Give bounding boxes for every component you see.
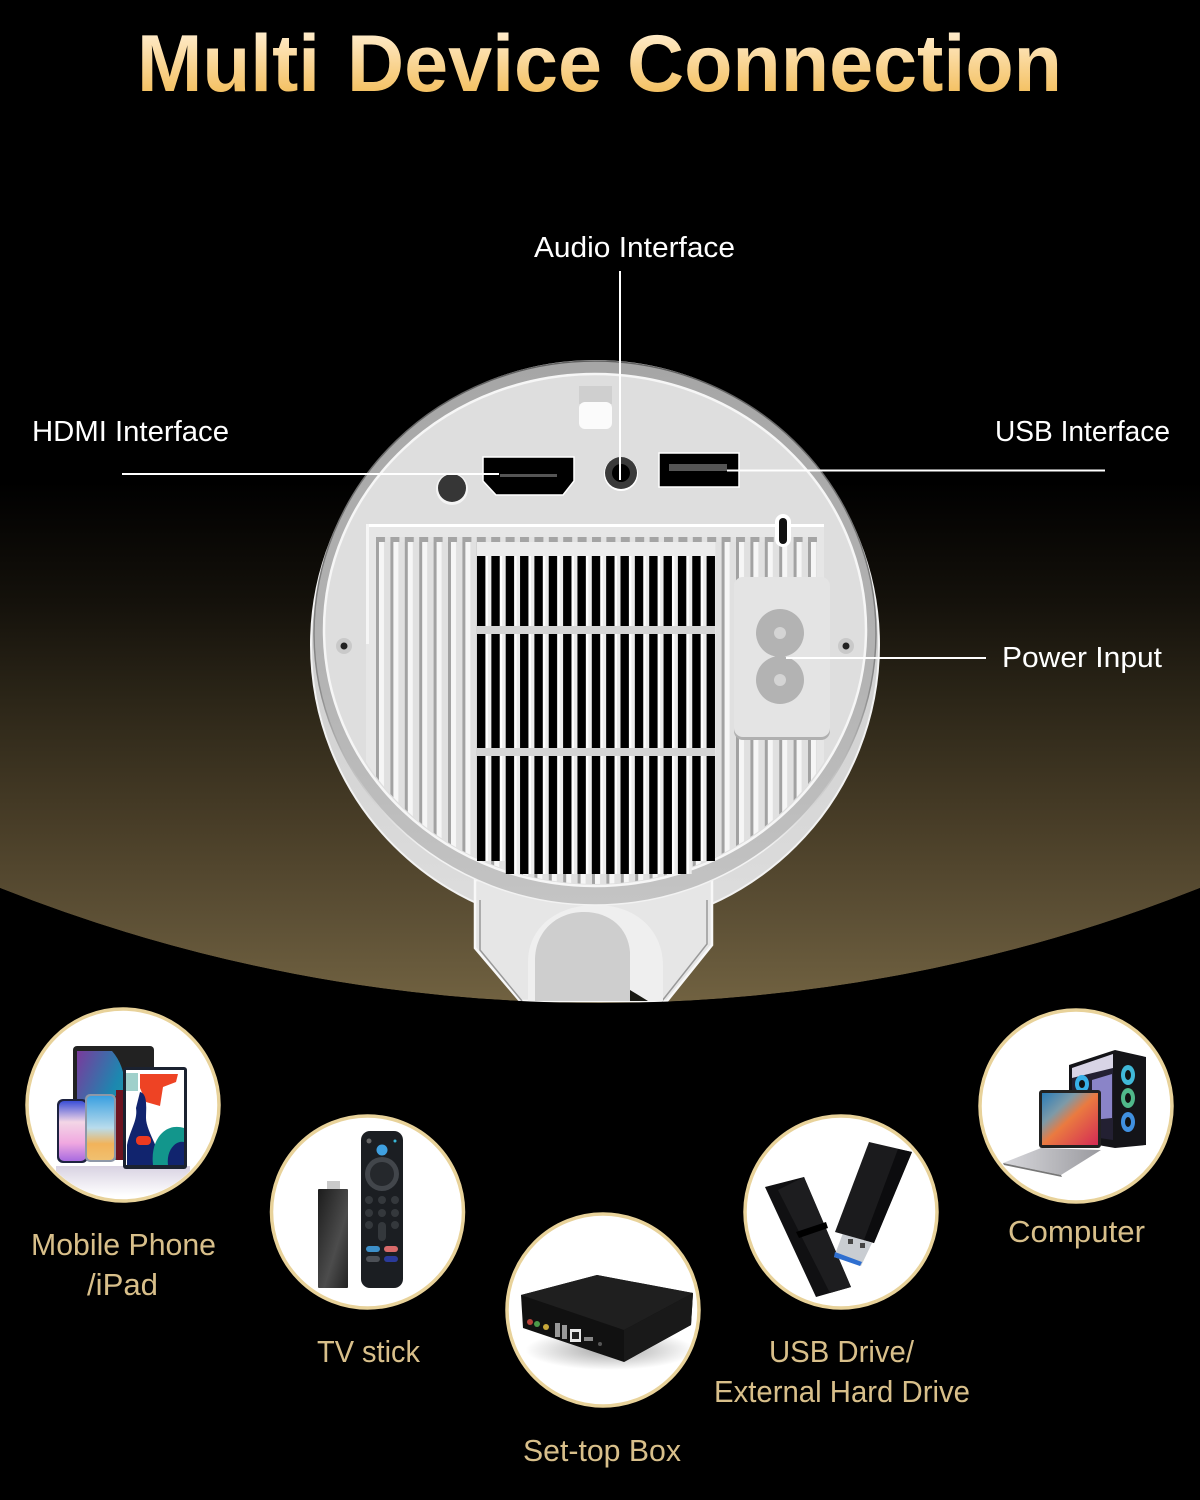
circle [745, 1116, 937, 1308]
screw left [336, 638, 352, 654]
icon: USB connector [834, 1233, 872, 1266]
bottom curve mask [0, 888, 1200, 1500]
outer body [311, 361, 879, 929]
device: USB drive [745, 1116, 937, 1308]
icon: right drive [835, 1142, 912, 1243]
icon: remote [361, 1131, 403, 1288]
icon: phone 2 [85, 1094, 116, 1162]
top tab [579, 386, 612, 429]
callout: audio interface: Audio Interface [534, 232, 735, 264]
USB port [659, 453, 739, 487]
label: USB drive: USB Drive/ [769, 1334, 914, 1369]
background gradient stage with curved base [0, 0, 1200, 1003]
label: mobile phone: Mobile Phone [31, 1227, 216, 1262]
circle [27, 1009, 219, 1201]
callout: USB interface: USB Interface [995, 416, 1170, 448]
callout: power input: Power Input [1002, 642, 1162, 674]
vent ribs [366, 524, 824, 894]
label: mobile phone [31, 1227, 216, 1302]
screw right [838, 638, 854, 654]
device: computer [980, 1010, 1172, 1202]
stem mount [475, 880, 712, 1001]
title: Device [347, 19, 602, 109]
icon: back tablet [73, 1046, 154, 1160]
circle [272, 1116, 464, 1308]
device: set-top box [507, 1214, 699, 1406]
audio port [604, 457, 638, 491]
device: mobile phone / iPad [27, 1009, 219, 1201]
label: computer: Computer [1008, 1214, 1145, 1249]
icon: laptop [1003, 1090, 1101, 1177]
title: Multi [137, 19, 320, 109]
icon: box [521, 1275, 695, 1370]
callout: HDMI interface: HDMI Interface [32, 416, 229, 448]
HDMI port [483, 457, 574, 495]
icon: left drive [765, 1177, 851, 1297]
power socket block [734, 577, 830, 740]
label: USB drive [714, 1334, 970, 1409]
label: mobile phone: /iPad [87, 1267, 158, 1302]
circle [980, 1010, 1172, 1202]
circle [507, 1214, 699, 1406]
label: set-top box: Set-top Box [523, 1433, 681, 1468]
inner plate [324, 374, 866, 886]
icon: tower [1069, 1050, 1146, 1148]
label: USB drive: External Hard Drive [714, 1374, 970, 1409]
projector rear panel [311, 361, 879, 1001]
ring band [314, 361, 876, 905]
lock slot [775, 514, 791, 547]
device: TV stick [272, 1116, 464, 1308]
vent slots [477, 542, 715, 874]
icon: phone 1 [57, 1099, 88, 1163]
icon: reflection [56, 1166, 190, 1196]
power button [436, 473, 468, 505]
icon: stick [318, 1181, 348, 1288]
label: TV stick: TV stick [317, 1334, 420, 1369]
title: Connection [627, 19, 1062, 109]
icon: front tablet [123, 1067, 187, 1169]
